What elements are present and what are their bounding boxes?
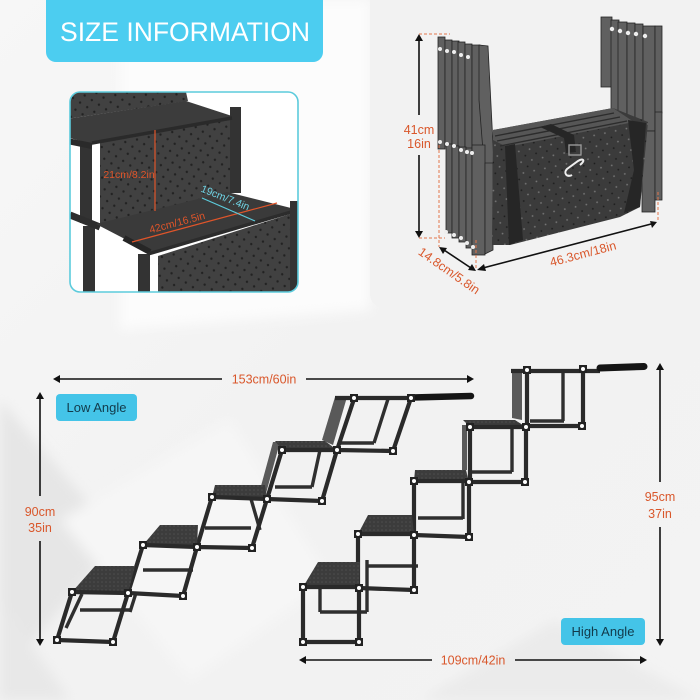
- dimension: folded width: 46.3cm/18in: [548, 238, 618, 270]
- heading: size information: SIZE INFORMATION: [60, 17, 310, 47]
- dimension: high angle height: 37in: [648, 507, 672, 521]
- label: low angle: [56, 394, 137, 421]
- dimension: high angle length: 109cm/42in: [441, 654, 505, 668]
- panel: folded size background: [370, 0, 700, 308]
- dimension: folded height: 16in: [407, 137, 431, 151]
- label: low angle: Low Angle: [66, 400, 126, 415]
- left upper hinges: [438, 37, 494, 164]
- dimension: low angle height: [25, 392, 55, 646]
- left lower hinges: [446, 144, 493, 255]
- folded steps box: [492, 108, 648, 245]
- dimension: high angle height: 95cm: [645, 490, 675, 504]
- panel: step dimensions inset: [60, 92, 298, 294]
- folded ramp product: [438, 17, 662, 255]
- dimension: step height: 21cm/8.2in: [103, 169, 155, 181]
- dimension: folded depth: 14.8cm/5.8in: [416, 245, 482, 297]
- dimension: step depth: 19cm/7.4in: [199, 183, 251, 213]
- dimension: step height: [103, 130, 155, 211]
- right lower hinges: [642, 112, 662, 212]
- dimension: low angle height: 90cm: [25, 505, 55, 519]
- dimension: low angle length: [53, 372, 474, 386]
- label: high angle: [561, 618, 645, 645]
- ramp: low angle: [53, 394, 471, 646]
- right upper hinges: [601, 17, 662, 131]
- ramp: high angle: [299, 365, 644, 646]
- label: high angle: High Angle: [572, 624, 634, 639]
- heading: size information: [46, 0, 323, 62]
- dimension: high angle length: [299, 654, 647, 668]
- dimension: folded height: [404, 34, 450, 247]
- handle: [412, 396, 471, 398]
- dimension: folded height: 41cm: [404, 123, 434, 137]
- hinge bolts: [438, 27, 647, 249]
- dimension: step width: 42cm/16.5in: [148, 210, 207, 236]
- handle: [600, 366, 644, 368]
- dimension: low angle length: 153cm/60in: [232, 372, 296, 386]
- dimension: low angle height: 35in: [28, 521, 52, 535]
- dimension: step width: [132, 203, 277, 242]
- dimension: folded width: [476, 192, 658, 271]
- dimension: high angle height: [645, 363, 675, 646]
